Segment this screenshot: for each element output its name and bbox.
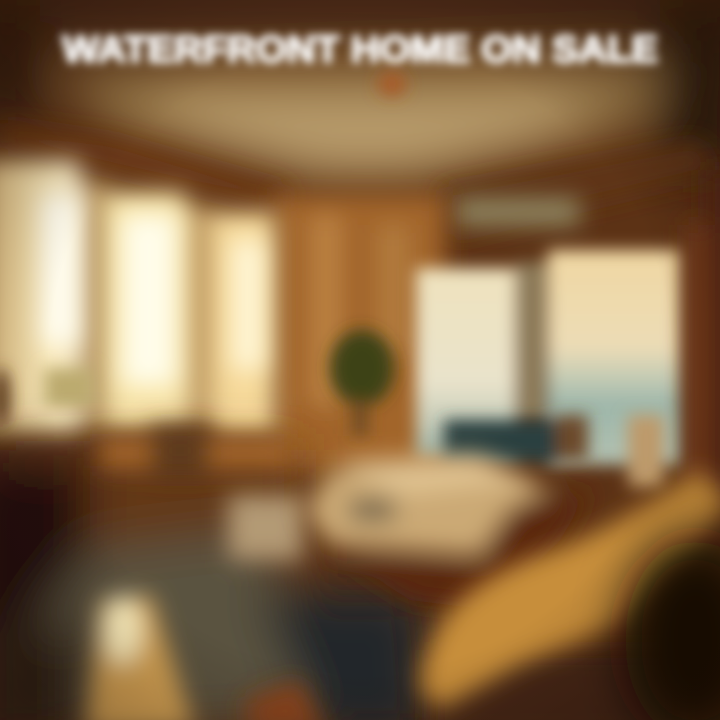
brown sofa base — [430, 650, 680, 720]
dark sofa with teal cushions — [444, 415, 664, 487]
back wall and curtains — [275, 195, 445, 475]
icon: potted plant — [330, 330, 394, 436]
dark sofa arm — [625, 540, 720, 720]
ceiling beams — [0, 122, 720, 236]
coffee table — [305, 455, 590, 610]
title: WATERFRONT HOME ON SALE — [62, 29, 658, 71]
sill glow — [100, 425, 290, 475]
right windows — [416, 250, 682, 465]
left windows — [0, 160, 276, 437]
ceiling — [0, 0, 720, 180]
title orange accent — [378, 72, 406, 96]
floor and lower room — [0, 450, 430, 720]
right curtain — [688, 170, 720, 500]
floor reflection — [85, 595, 325, 720]
left window glow — [42, 195, 264, 385]
vent on wall — [455, 198, 580, 226]
golden throw on sofa — [420, 470, 720, 710]
windowsill plant — [0, 368, 94, 428]
side table — [228, 495, 303, 560]
